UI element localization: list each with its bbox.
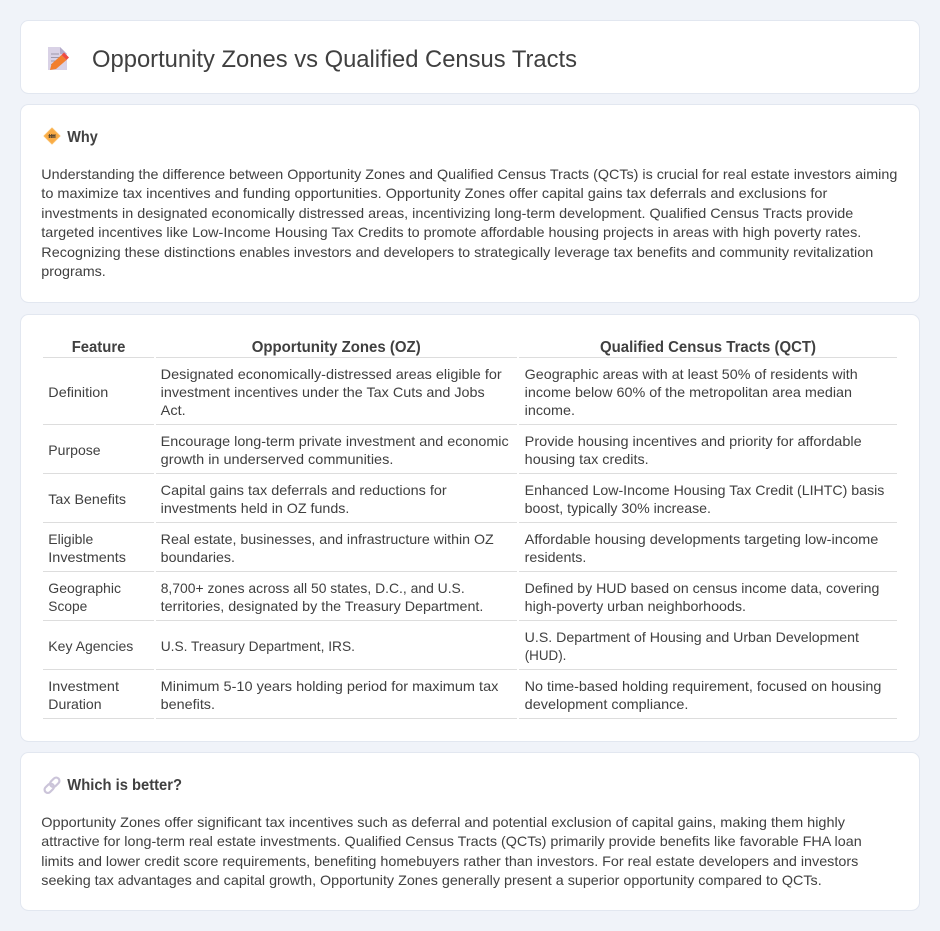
table row: definition: Geographic areas with at least 50% of residents with — [525, 366, 858, 382]
text block: why paragraph: targeted incentives like Low-Income Housing Tax Credits to promote affordable housing projects in areas with high poverty rates. — [41, 224, 861, 240]
table row: eligible investments — [43, 531, 897, 572]
table row: purpose: Encourage long-term private investment and economic — [161, 433, 509, 449]
text block: why paragraph: investments in designated economically distressed areas, incentivizing long-term development. Qualified Census Tracts provide — [41, 205, 854, 221]
table row: tax benefits — [43, 482, 897, 523]
text block: which is better paragraph: limits and lower credit score requirements, benefiting homebuyers rather than investors. For real estate developers and investors — [41, 853, 858, 869]
table row: key agencies — [43, 629, 897, 670]
table row: geographic scope: territories, designated by the Treasury Department. — [161, 598, 483, 614]
table row: eligible investments: Affordable housing developments targeting low-income — [525, 531, 879, 547]
table row: definition: Act. — [161, 402, 186, 418]
table row: investment duration: Duration — [48, 696, 102, 712]
table row: purpose: housing tax credits. — [525, 451, 649, 467]
table row: key agencies: (HUD). — [525, 647, 566, 663]
text block: why paragraph: programs. — [41, 263, 106, 279]
table row: tax benefits: Enhanced Low-Income Housing Tax Credit (LIHTC) basis — [525, 482, 884, 498]
table row: tax benefits: Tax Benefits — [48, 491, 126, 507]
table row: geographic scope: Defined by HUD based on census income data, covering — [525, 580, 879, 596]
table row: investment duration: Investment — [48, 678, 119, 694]
table row: key agencies: U.S. Department of Housing and Urban Development — [525, 629, 859, 645]
table header row: Opportunity Zones (OZ) — [252, 339, 421, 356]
panel: which is better — [20, 752, 920, 910]
text block: which is better paragraph: Opportunity Zones offer significant tax incentives such as deferral and potential exclusion of capital gains, making them highly — [41, 814, 845, 830]
table row: definition: income below 60% of the metropolitan area median — [525, 384, 852, 400]
text block: why paragraph: Recognizing these distinctions enables investors and developers to strategically leverage tax benefits and community revitalization — [41, 244, 873, 260]
table row: investment duration: No time-based holding requirement, focused on housing — [525, 678, 881, 694]
table header row: Feature — [72, 339, 125, 356]
table row: eligible investments: Eligible — [48, 531, 94, 547]
table row: definition: income. — [525, 402, 575, 418]
text block: why paragraph: Understanding the difference between Opportunity Zones and Qualified Census Tracts (QCTs) is crucial for real estate investors aiming — [41, 166, 897, 182]
table row: investment duration: benefits. — [161, 696, 215, 712]
table row: tax benefits: investments held in OZ funds. — [161, 500, 349, 516]
title: Opportunity Zones vs Qualified Census Tracts — [92, 46, 577, 73]
table row: purpose: Provide housing incentives and priority for affordable — [525, 433, 862, 449]
text block: why paragraph — [41, 166, 897, 279]
panel: why — [20, 104, 920, 302]
icon: warning diamond — [44, 128, 60, 144]
text block: which is better paragraph — [41, 814, 862, 888]
table row: eligible investments: residents. — [525, 549, 586, 565]
table row: eligible investments: Real estate, businesses, and infrastructure within OZ — [161, 531, 494, 547]
table row: eligible investments: Investments — [48, 549, 126, 565]
text block: why paragraph: to maximize tax incentives and funding opportunities. Opportunity Zones offer capital gains tax deferrals and exclusions for — [41, 185, 828, 201]
text block: which is better paragraph: attractive for long-term real estate investments. Qualified Census Tracts (QCTs) primarily provide benefits like favorable FHA loan — [41, 833, 862, 849]
table row: purpose — [43, 433, 897, 474]
table row: geographic scope: high-poverty urban neighborhoods. — [525, 598, 746, 614]
table header row: Qualified Census Tracts (QCT) — [600, 339, 816, 356]
table row: geographic scope: Scope — [48, 598, 88, 614]
table row: definition: Definition — [48, 384, 108, 400]
table row: eligible investments: boundaries. — [161, 549, 235, 565]
table row: key agencies: Key Agencies — [48, 638, 133, 654]
table row: investment duration: Minimum 5-10 years holding period for maximum tax — [161, 678, 498, 694]
icon: chain link — [43, 776, 61, 794]
table row: geographic scope — [43, 580, 897, 621]
table row: definition — [43, 366, 897, 425]
table row: investment duration: development compliance. — [525, 696, 688, 712]
table row: definition: Designated economically-distressed areas eligible for — [161, 366, 502, 382]
text block: which is better paragraph: seeking tax advantages and capital growth, Opportunity Zones generally present a superior opportunity compared to QCTs. — [41, 872, 822, 888]
table row: purpose: growth in underserved communities. — [161, 451, 393, 467]
table header row — [43, 339, 897, 358]
table row: definition: investment incentives under the Tax Cuts and Jobs — [161, 384, 485, 400]
table row: investment duration — [43, 678, 897, 719]
table row: key agencies: U.S. Treasury Department, IRS. — [161, 638, 355, 654]
table row: tax benefits: boost, typically 30% increase. — [525, 500, 711, 516]
heading: why: Why — [67, 129, 98, 146]
table row: geographic scope: 8,700+ zones across all 50 states, D.C., and U.S. — [161, 580, 465, 596]
icon: document with pencil — [48, 47, 69, 70]
table row: purpose: Purpose — [48, 442, 101, 458]
panel: comparison table — [20, 314, 920, 742]
table row: tax benefits: Capital gains tax deferrals and reductions for — [161, 482, 447, 498]
panel: title header — [20, 20, 920, 94]
heading: which is better: Which is better? — [67, 777, 182, 794]
table row: geographic scope: Geographic — [48, 580, 121, 596]
